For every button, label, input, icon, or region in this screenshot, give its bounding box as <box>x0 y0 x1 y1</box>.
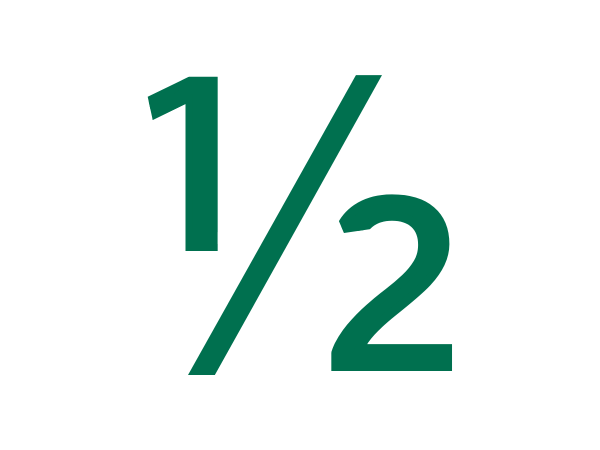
denominator: 2: 2 <box>324 151 460 418</box>
numerator: 1: 1 <box>126 22 267 305</box>
fraction: one half <box>148 75 452 375</box>
